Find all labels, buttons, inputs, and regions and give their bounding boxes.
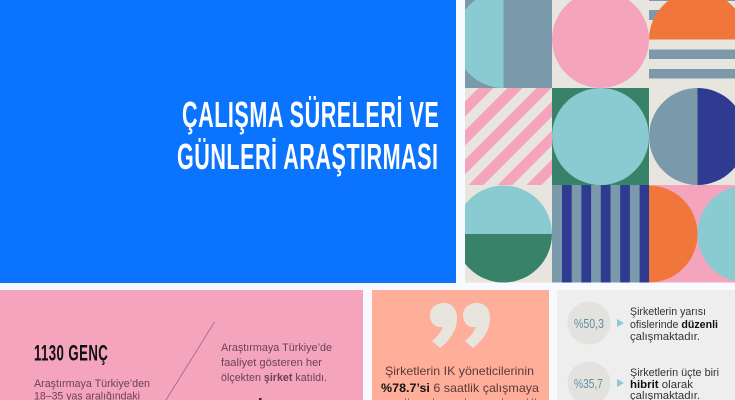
text: young participants: Araştırmaya Türkiye’den xyxy=(34,378,150,390)
text: quote body: %78.7’si 6 saatlik çalışmaya xyxy=(381,381,539,395)
tile: orange half circle and teal circle on pink xyxy=(649,185,735,282)
tile: teal and green circle xyxy=(465,186,552,282)
title line 2: GÜNLERİ ARAŞTIRMASI xyxy=(177,137,438,177)
tile: pink diagonal stripes xyxy=(465,88,552,185)
title panel xyxy=(0,0,456,283)
text: participating companies: Araştırmaya Türkiye’de xyxy=(221,342,332,354)
panel: work models xyxy=(557,290,735,400)
tile: teal half circle on slate xyxy=(465,0,552,88)
text: quote body xyxy=(381,364,539,395)
stat: hybrid xyxy=(568,362,719,400)
stat: hybrid: %35,7 xyxy=(574,377,603,391)
text: young participants xyxy=(34,378,150,400)
stat: hybrid: hibrit olarak xyxy=(630,379,694,391)
tile: vertical stripes xyxy=(552,185,649,283)
stat: regular office: ofislerinde düzenli xyxy=(630,319,718,331)
panel: quote xyxy=(372,290,549,400)
text: participating companies: ölçekten şirket katıldı. xyxy=(221,372,327,384)
stat: regular office xyxy=(568,302,718,344)
text: participating companies xyxy=(221,342,332,384)
stat: regular office: çalışmaktadır. xyxy=(630,331,700,343)
icon: quotation marks xyxy=(430,303,490,348)
tile: orange half circle with stripes xyxy=(649,0,735,78)
stat: regular office: Şirketlerin yarısı xyxy=(630,306,706,318)
divider slash xyxy=(166,322,214,400)
stat: regular office: %50,3 xyxy=(574,317,604,331)
tile: slate and navy circle xyxy=(649,88,735,185)
cut-off heading top at page edge xyxy=(259,398,262,400)
tile: pink circle xyxy=(552,0,649,88)
panel: participants xyxy=(0,290,363,400)
tile: teal circle on green xyxy=(552,88,649,185)
text: participating companies: faaliyet gösteren her xyxy=(221,357,322,369)
stat: hybrid: Şirketlerin üçte biri xyxy=(630,367,719,379)
title line 1: ÇALIŞMA SÜRELERİ VE xyxy=(182,95,439,135)
geometric pattern artwork xyxy=(465,0,735,282)
cut-off third quote line at page edge xyxy=(405,398,536,400)
heading: 1130 genç: 1130 GENÇ xyxy=(34,341,108,365)
text: quote body: Şirketlerin IK yöneticilerinin xyxy=(385,364,534,378)
